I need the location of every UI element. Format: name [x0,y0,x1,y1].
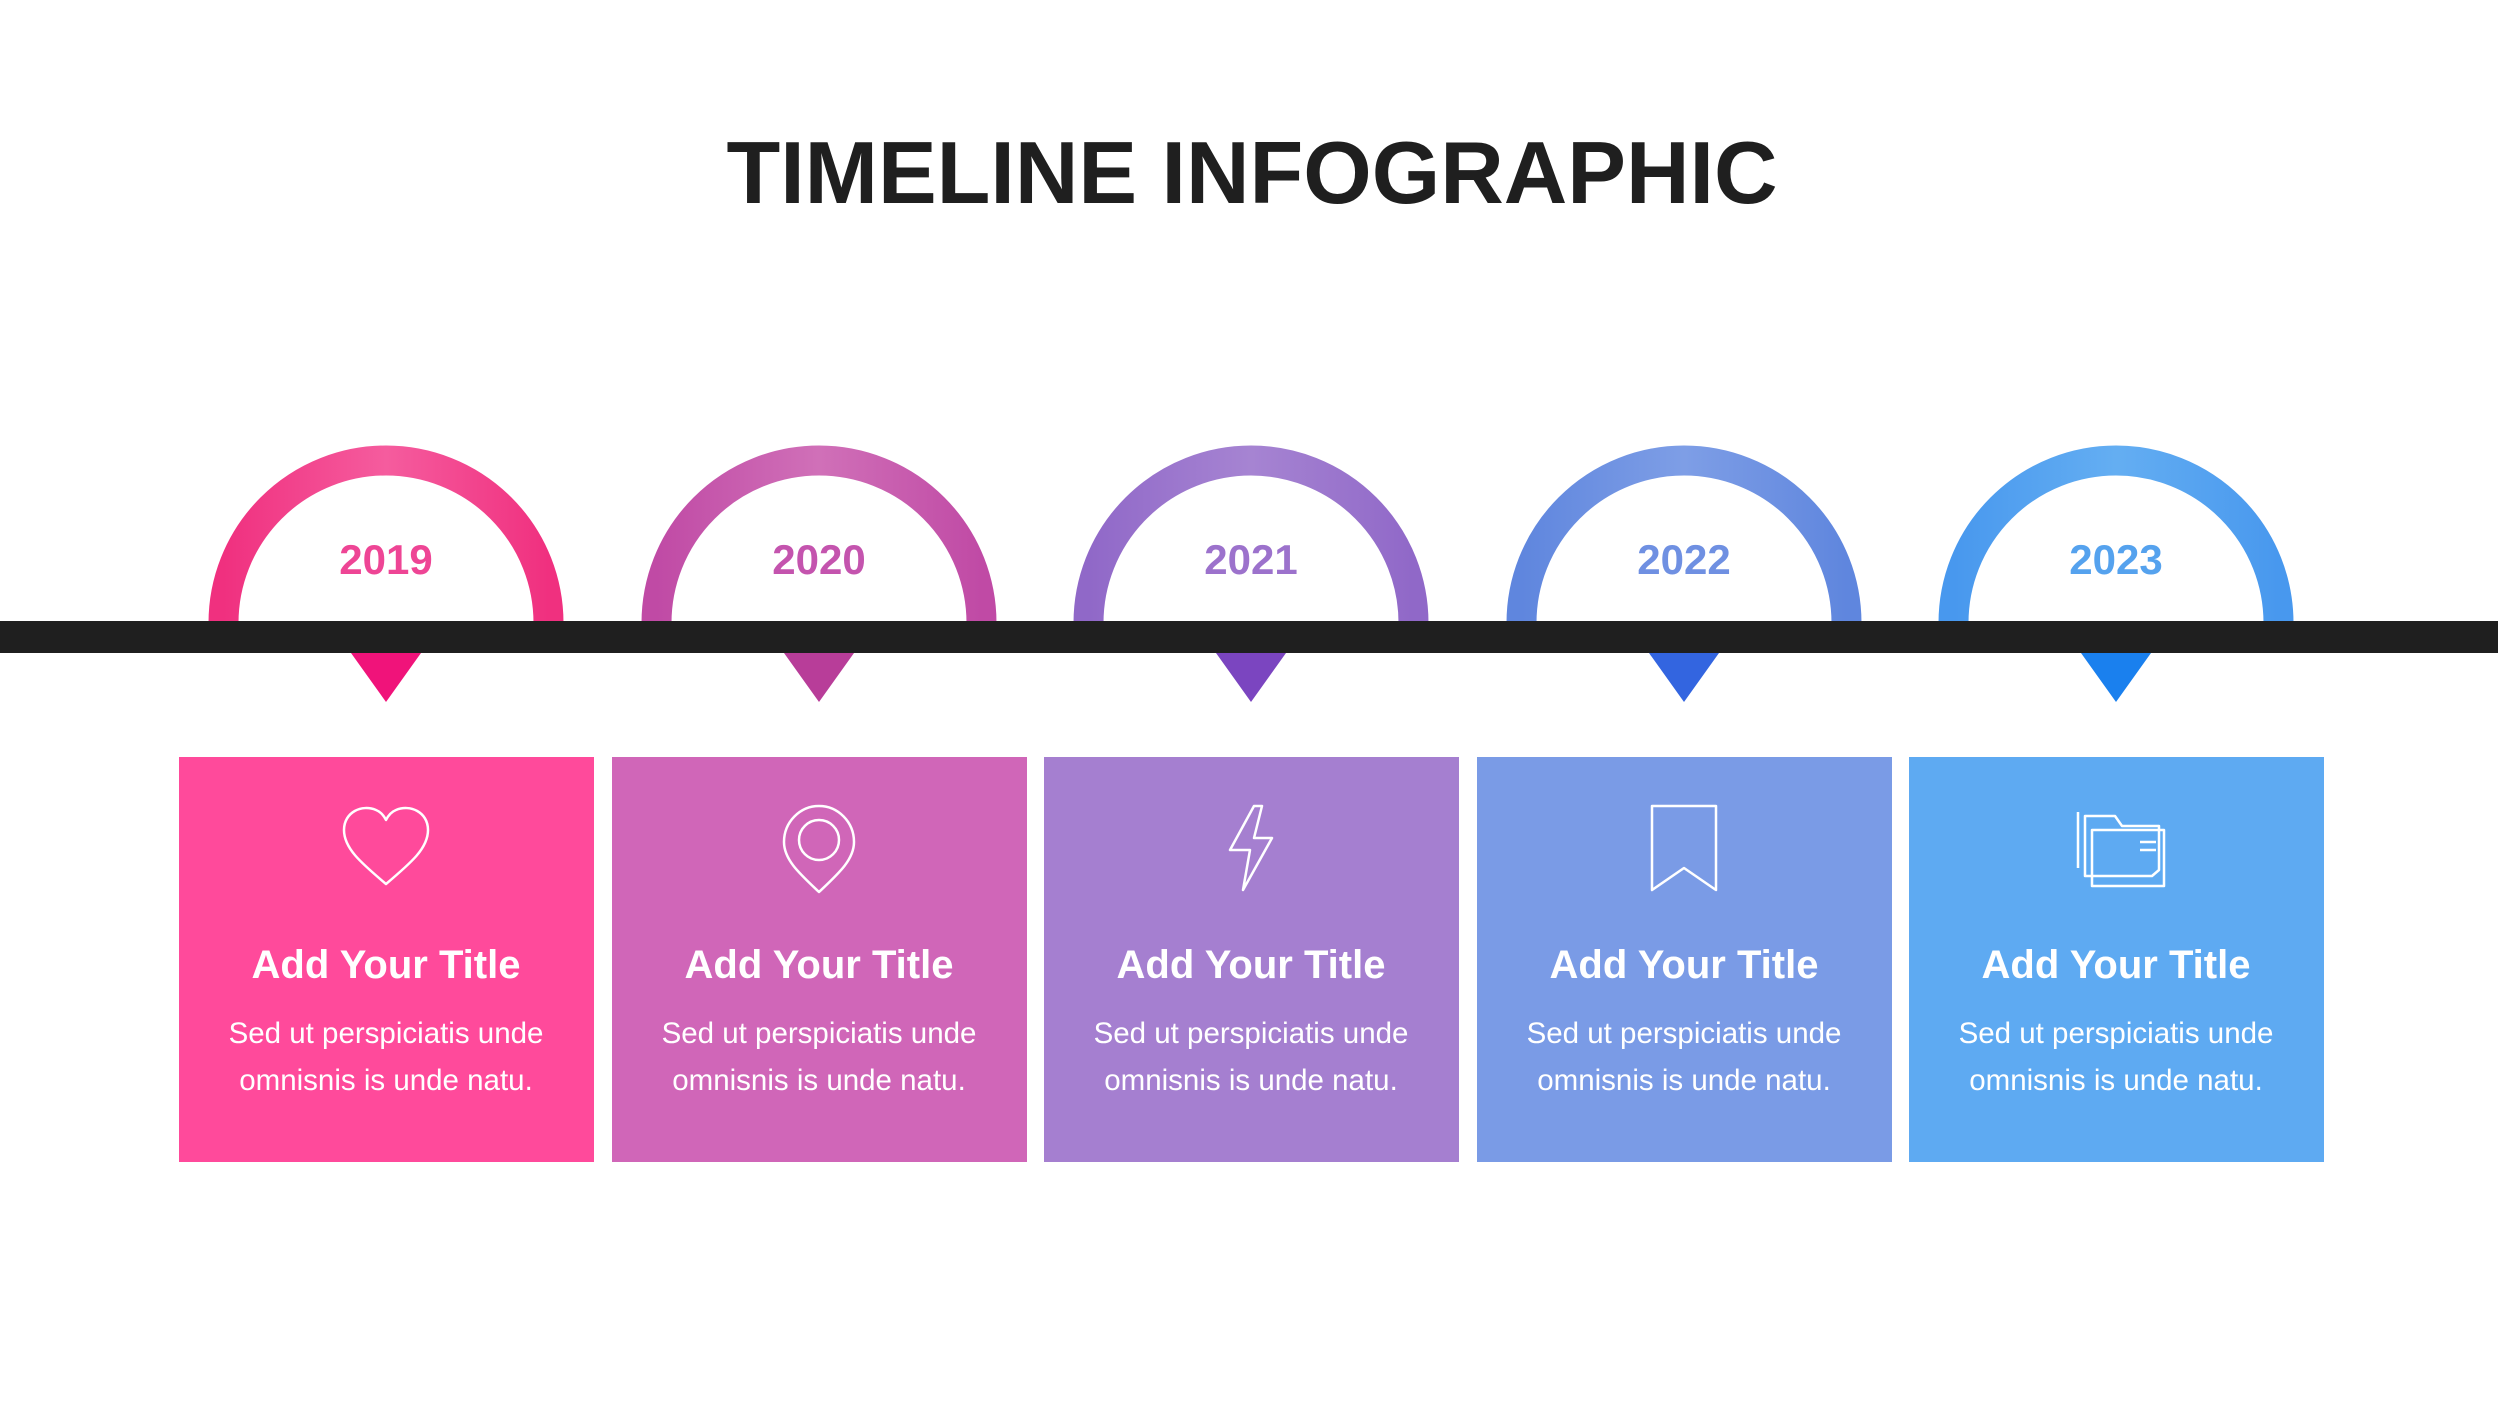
years [339,536,2163,583]
box titles [252,943,2250,987]
years: 2021 [1204,536,1298,583]
boxes [179,757,2324,1162]
box body text: omnisnis is unde natu. [1969,1064,2263,1097]
box body text: omnisnis is unde natu. [1537,1064,1831,1097]
box body text: Sed ut perspiciatis unde [1527,1017,1841,1050]
box titles: Add Your Title [1117,943,1385,987]
box body text: omnisnis is unde natu. [1104,1064,1398,1097]
title: TIMELINE INFOGRAPHIC [726,123,1778,222]
box body text: omnisnis is unde natu. [239,1064,533,1097]
box titles: Add Your Title [685,943,953,987]
years: 2019 [339,536,433,583]
pointers [351,653,2151,702]
box body text: Sed ut perspiciatis unde [229,1017,543,1050]
box body text: omnisnis is unde natu. [672,1064,966,1097]
box titles: Add Your Title [252,943,520,987]
box body text [229,1017,2273,1097]
years: 2022 [1637,536,1731,583]
years: 2020 [772,536,866,583]
timeline bar [0,621,2498,653]
box body text: Sed ut perspiciatis unde [1959,1017,2273,1050]
box titles: Add Your Title [1550,943,1818,987]
years: 2023 [2069,536,2163,583]
icons [344,806,2164,892]
arcs [224,460,2278,623]
box titles: Add Your Title [1982,943,2250,987]
box body text: Sed ut perspiciatis unde [662,1017,976,1050]
box body text: Sed ut perspiciatis unde [1094,1017,1408,1050]
